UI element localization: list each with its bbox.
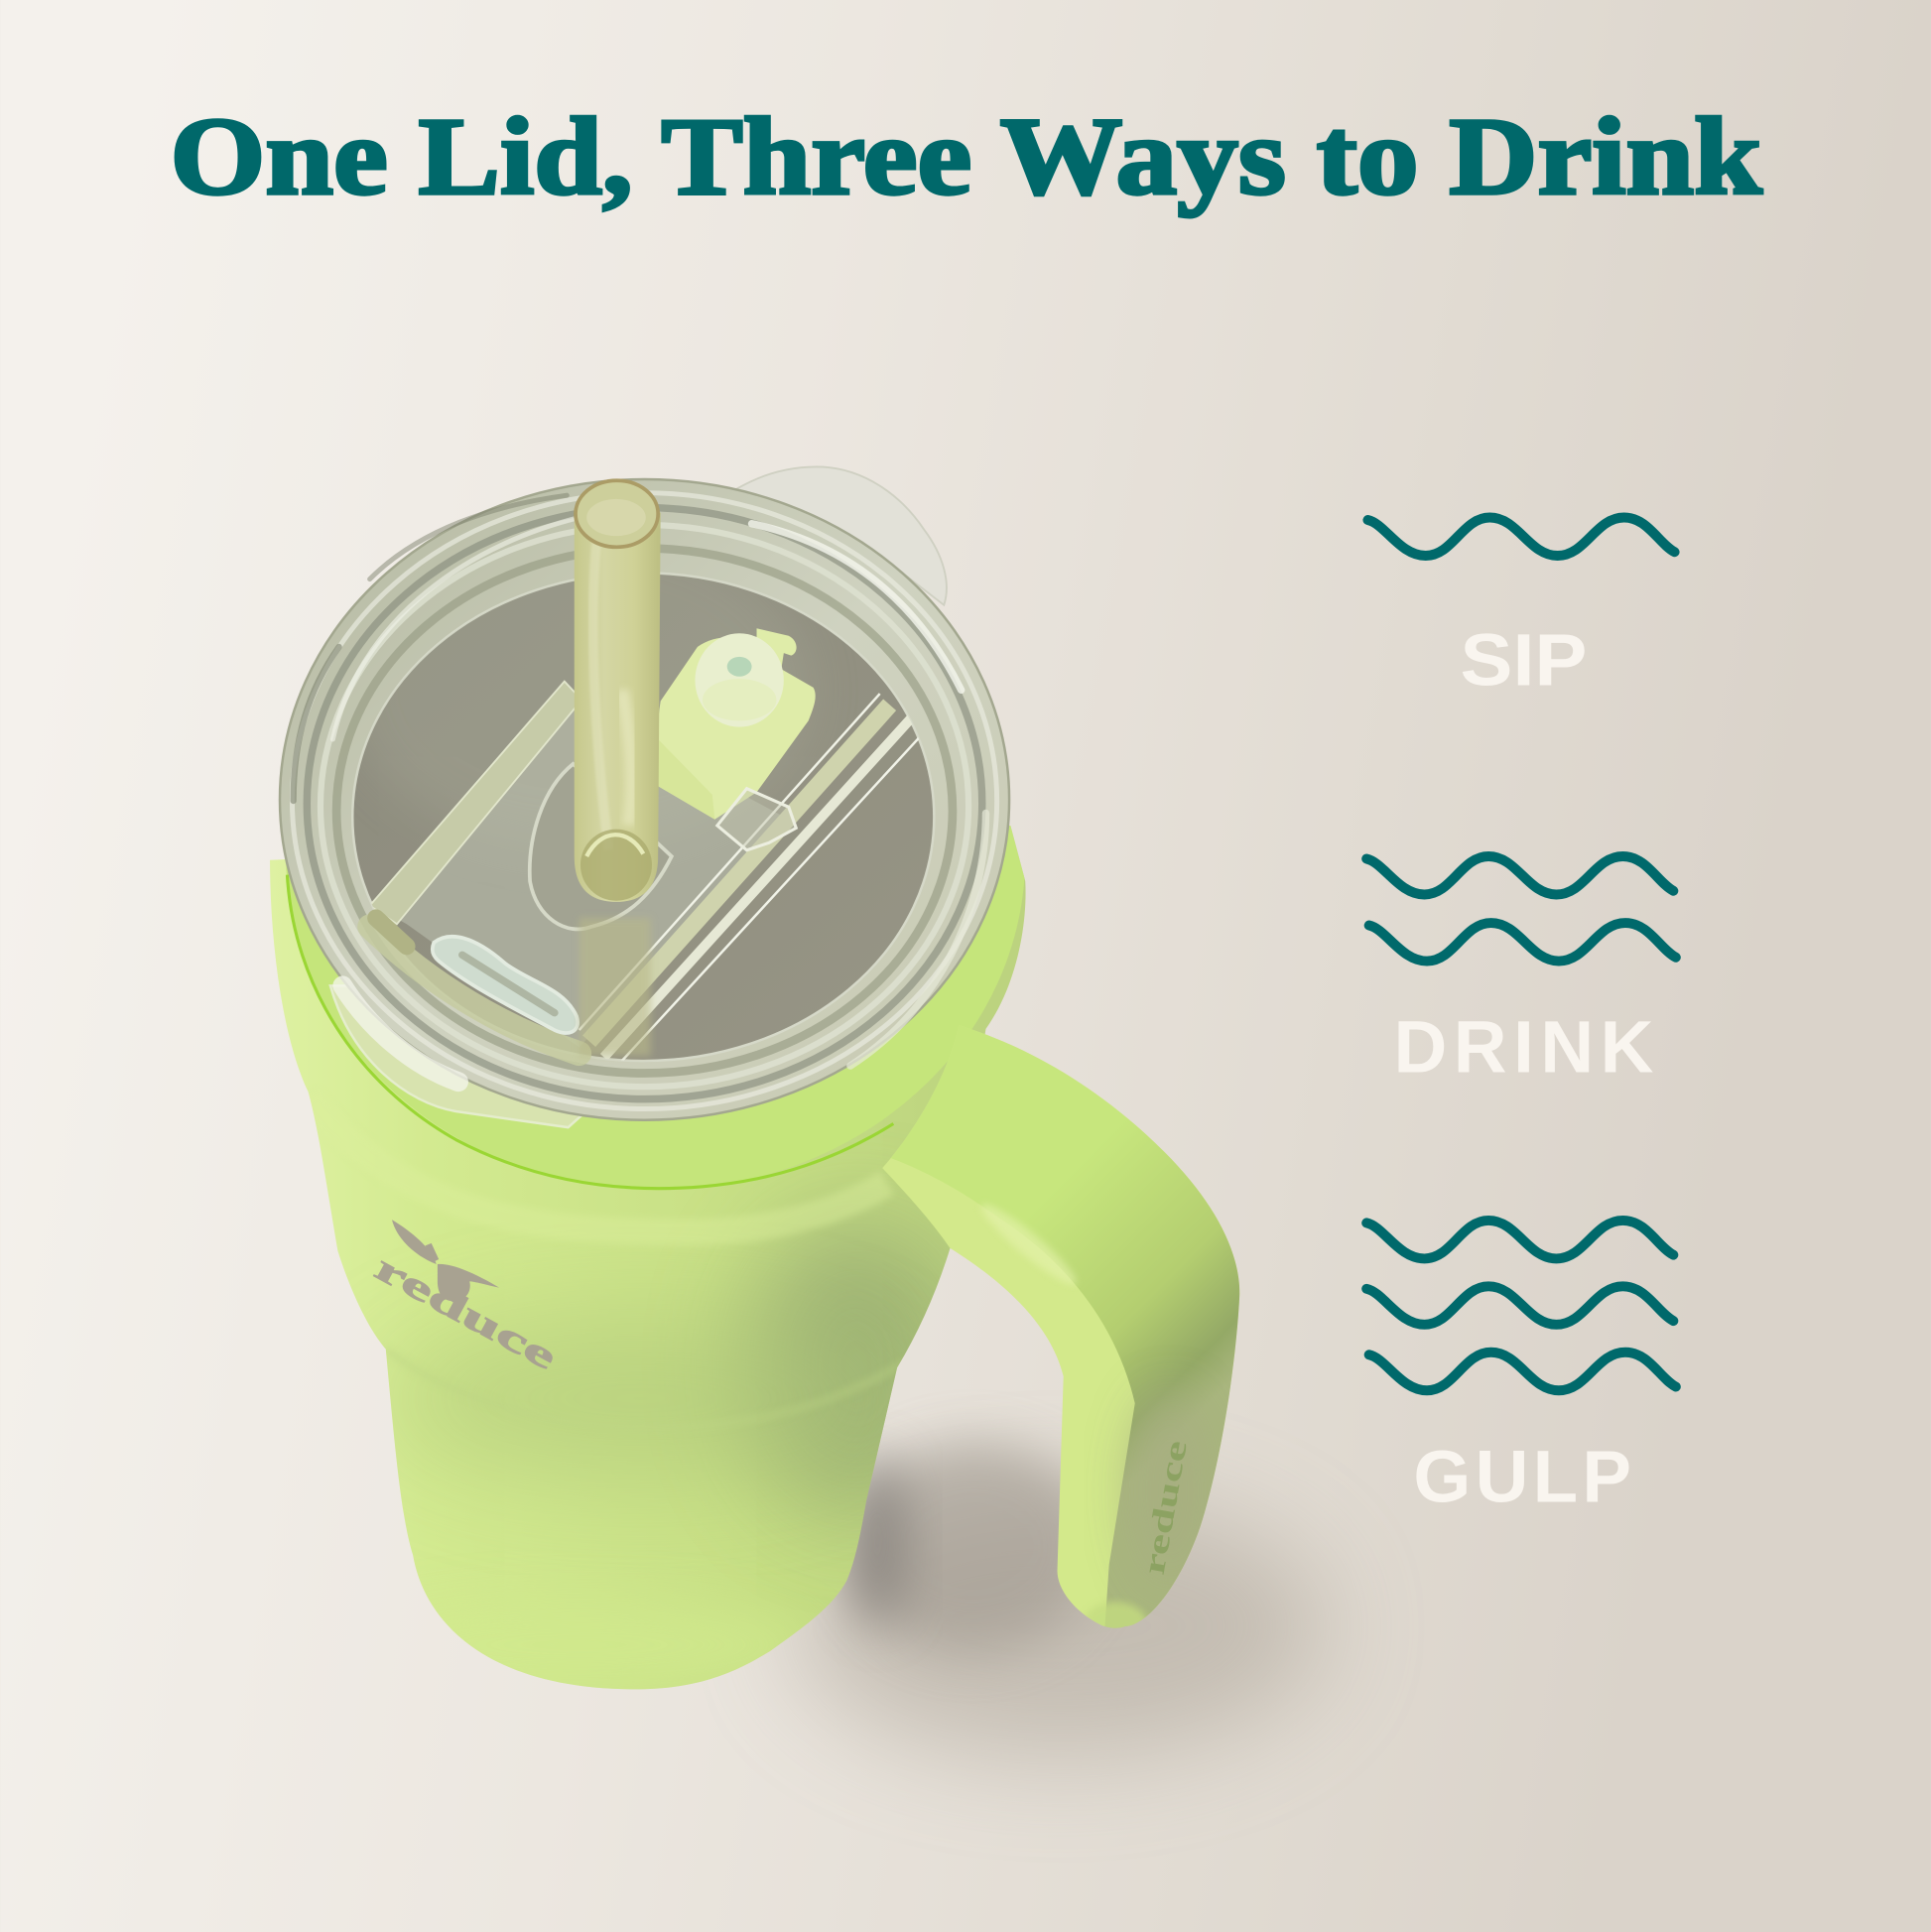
sliding clip [717, 789, 796, 850]
SIP option [1367, 518, 1675, 701]
channel rail right [579, 694, 927, 1067]
upper collar [286, 826, 1024, 1191]
straw [575, 480, 661, 902]
silicone stopper [656, 628, 816, 820]
three waves icon [1366, 1221, 1676, 1390]
handle side facet [891, 1026, 1240, 1627]
straw socket [530, 764, 672, 929]
lid pull tab [732, 466, 947, 605]
logo wordmark: reduce [368, 1247, 563, 1378]
SIP label: SIP [1461, 618, 1587, 701]
handle embossed logo: reduce [1136, 1438, 1194, 1577]
two waves icon [1366, 856, 1676, 962]
straw reflection [579, 918, 651, 1056]
logo [368, 1220, 563, 1378]
lid well interior [352, 573, 934, 1061]
DRINK option [1366, 856, 1676, 1088]
light band under ring [309, 1096, 887, 1232]
one wave icon [1367, 518, 1675, 556]
straw top opening [576, 480, 658, 547]
center sipping channel [401, 710, 780, 1042]
title: One Lid, Three Ways to Drink [170, 95, 1762, 218]
logo leaf mark [392, 1220, 499, 1301]
GULP option [1366, 1221, 1676, 1518]
gasket seal [433, 937, 578, 1033]
tumbler [270, 466, 1257, 1689]
lid outer rim [280, 479, 1009, 1120]
handle [883, 1030, 1240, 1628]
DRINK label: DRINK [1393, 1005, 1654, 1088]
lower lid lip [330, 985, 616, 1127]
GULP label: GULP [1413, 1436, 1631, 1518]
tumbler body [270, 826, 1026, 1689]
bottom left hinge [342, 918, 579, 1082]
tumbler shadow [795, 1442, 1325, 1755]
rim highlights [294, 495, 985, 1066]
green gasket ring [287, 875, 893, 1189]
lid [280, 466, 1009, 1127]
channel rail left [370, 682, 581, 924]
